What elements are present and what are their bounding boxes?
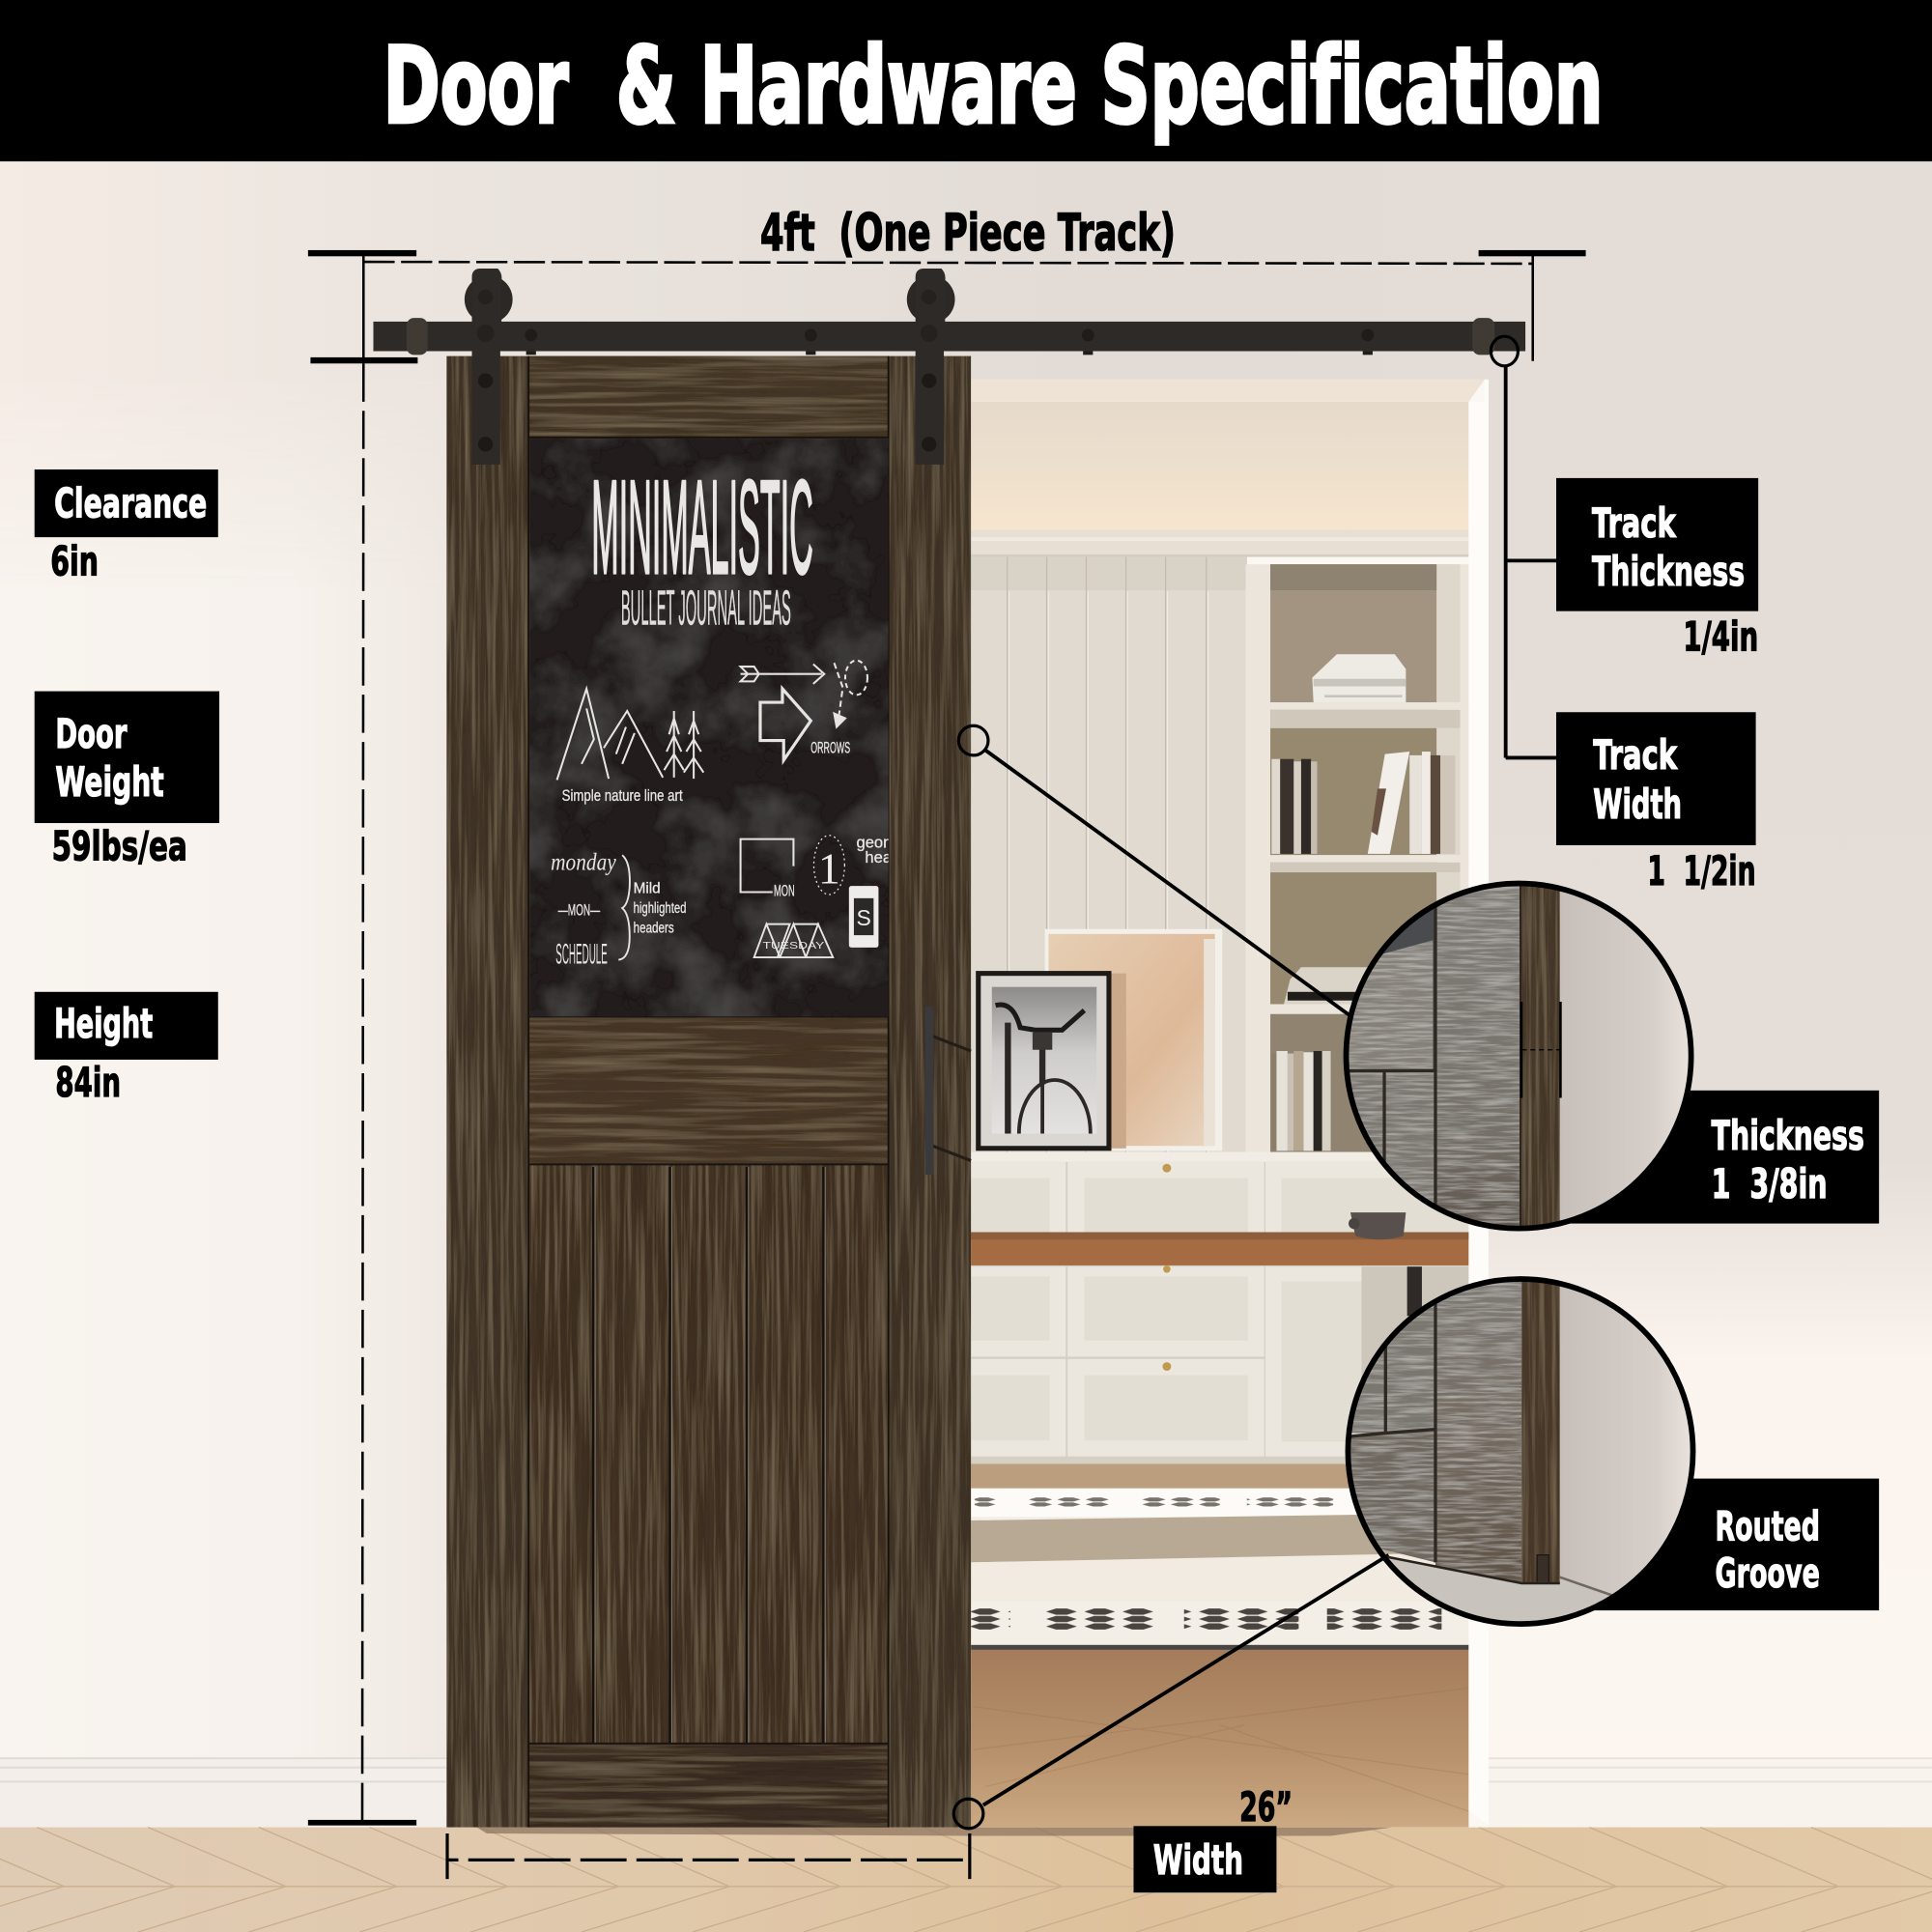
chalk weekday headers: highlighted: [634, 900, 686, 917]
label: height: Height: [54, 1000, 153, 1047]
chalk mountains: [557, 689, 703, 780]
label: track thickness: [1556, 478, 1758, 660]
barn door: [446, 356, 971, 1828]
barn door: BULLET JOURNAL IDEAS: [621, 581, 791, 636]
thickness ticks: [1521, 1002, 1560, 1097]
chalk calendar headers: [741, 834, 905, 957]
door planks: [528, 1164, 889, 1744]
magnifier: routed groove detail: [1346, 1279, 1695, 1625]
bookcase: [1246, 564, 1468, 1152]
dimension: clearance and height: [308, 357, 417, 1826]
bicycle photo frame: [976, 971, 1112, 1151]
label: track width: 1 1/2in: [1647, 847, 1756, 895]
left hanger: [465, 269, 513, 465]
chalk weekday headers: Mild: [634, 881, 661, 897]
chalkboard panel: [529, 439, 905, 1016]
end stoppers: [407, 318, 1494, 355]
chalk weekday headers: SCHEDULE: [555, 938, 608, 970]
chalk calendar headers: head: [865, 848, 900, 867]
marker and leader: track: [1491, 336, 1556, 757]
chalk calendar headers: geome: [856, 834, 905, 852]
foreground floor: [0, 1828, 1932, 1932]
label: door weight: Weight: [55, 758, 164, 806]
room floor: [971, 1463, 1468, 1489]
label: clearance: [35, 469, 218, 585]
chalk caption arrows: ORROWS: [810, 738, 850, 756]
label: width: 26”: [1239, 1783, 1293, 1831]
label: thickness: 1 3/8in: [1712, 1160, 1828, 1208]
books lower shelf: [1271, 967, 1368, 1151]
label: door weight: 59lbs/ea: [52, 822, 187, 869]
label: track width: Track: [1593, 731, 1678, 779]
right hanger: [907, 269, 955, 465]
books middle shelf: [1271, 752, 1455, 854]
door rails: [528, 356, 889, 1828]
chalk calendar headers: TUESDAY: [763, 941, 825, 952]
room seen through doorway: [971, 380, 1489, 1828]
track bolts: [525, 329, 1374, 355]
door handle: [925, 1007, 971, 1175]
crown moulding: [971, 529, 1468, 557]
label: door weight: [35, 692, 219, 869]
chalk calendar headers: 1: [818, 844, 840, 894]
label: width: Width: [1153, 1836, 1243, 1884]
wooden desktop: [971, 1233, 1468, 1265]
book stack: [1312, 654, 1406, 702]
label: track width: [1556, 712, 1756, 895]
ceramic bowl: [1349, 1212, 1406, 1239]
label: clearance: Clearance: [54, 480, 207, 527]
lower cabinets: [971, 1152, 1468, 1463]
label: clearance: 6in: [50, 538, 99, 585]
label: routed groove: Routed: [1716, 1502, 1820, 1549]
label: door weight: Door: [55, 710, 128, 757]
sliding track hardware: [373, 269, 1525, 465]
chalk weekday headers: [551, 848, 686, 970]
label: track thickness: Thickness: [1592, 548, 1745, 595]
chalk calendar headers: S: [856, 905, 871, 930]
infographic canvas: MINIMALISTIC: [591, 453, 813, 602]
chalk weekday headers: headers: [634, 921, 674, 937]
track rail: [373, 322, 1525, 352]
chalk calendar headers: MON: [774, 881, 795, 899]
label: thickness: [1565, 1091, 1879, 1224]
chalk arrows: [741, 661, 867, 760]
label: track thickness: Track: [1592, 499, 1676, 547]
dimension: track length: [308, 204, 1586, 361]
marker and leader: routed groove: [953, 1555, 1389, 1829]
chalk weekday headers: monday: [551, 848, 616, 876]
chalk weekday headers: —MON—: [558, 901, 600, 920]
door jamb: [971, 380, 1489, 1825]
ceiling: [971, 402, 1468, 529]
panelled wall: [971, 557, 1247, 1152]
dimension: door width: [447, 1833, 970, 1879]
label: thickness: Thickness: [1712, 1112, 1864, 1159]
track length text: 4ft (One Piece Track): [760, 204, 1176, 263]
chalk caption nature: Simple nature line art: [562, 786, 683, 805]
label: height: [35, 992, 218, 1106]
rug: [971, 1489, 1468, 1650]
label: track thickness: 1/4in: [1683, 612, 1758, 660]
marker and leader: door thickness: [958, 725, 1353, 1018]
watercolour frame: [1045, 929, 1222, 1151]
label: height: 84in: [55, 1059, 121, 1106]
label: routed groove: [1589, 1479, 1879, 1610]
label: track width: Width: [1593, 781, 1682, 828]
magnifier: door thickness detail: [1345, 882, 1693, 1230]
label: routed groove: Groove: [1716, 1549, 1820, 1597]
label: width: [1133, 1783, 1293, 1892]
header band: [0, 0, 1932, 161]
